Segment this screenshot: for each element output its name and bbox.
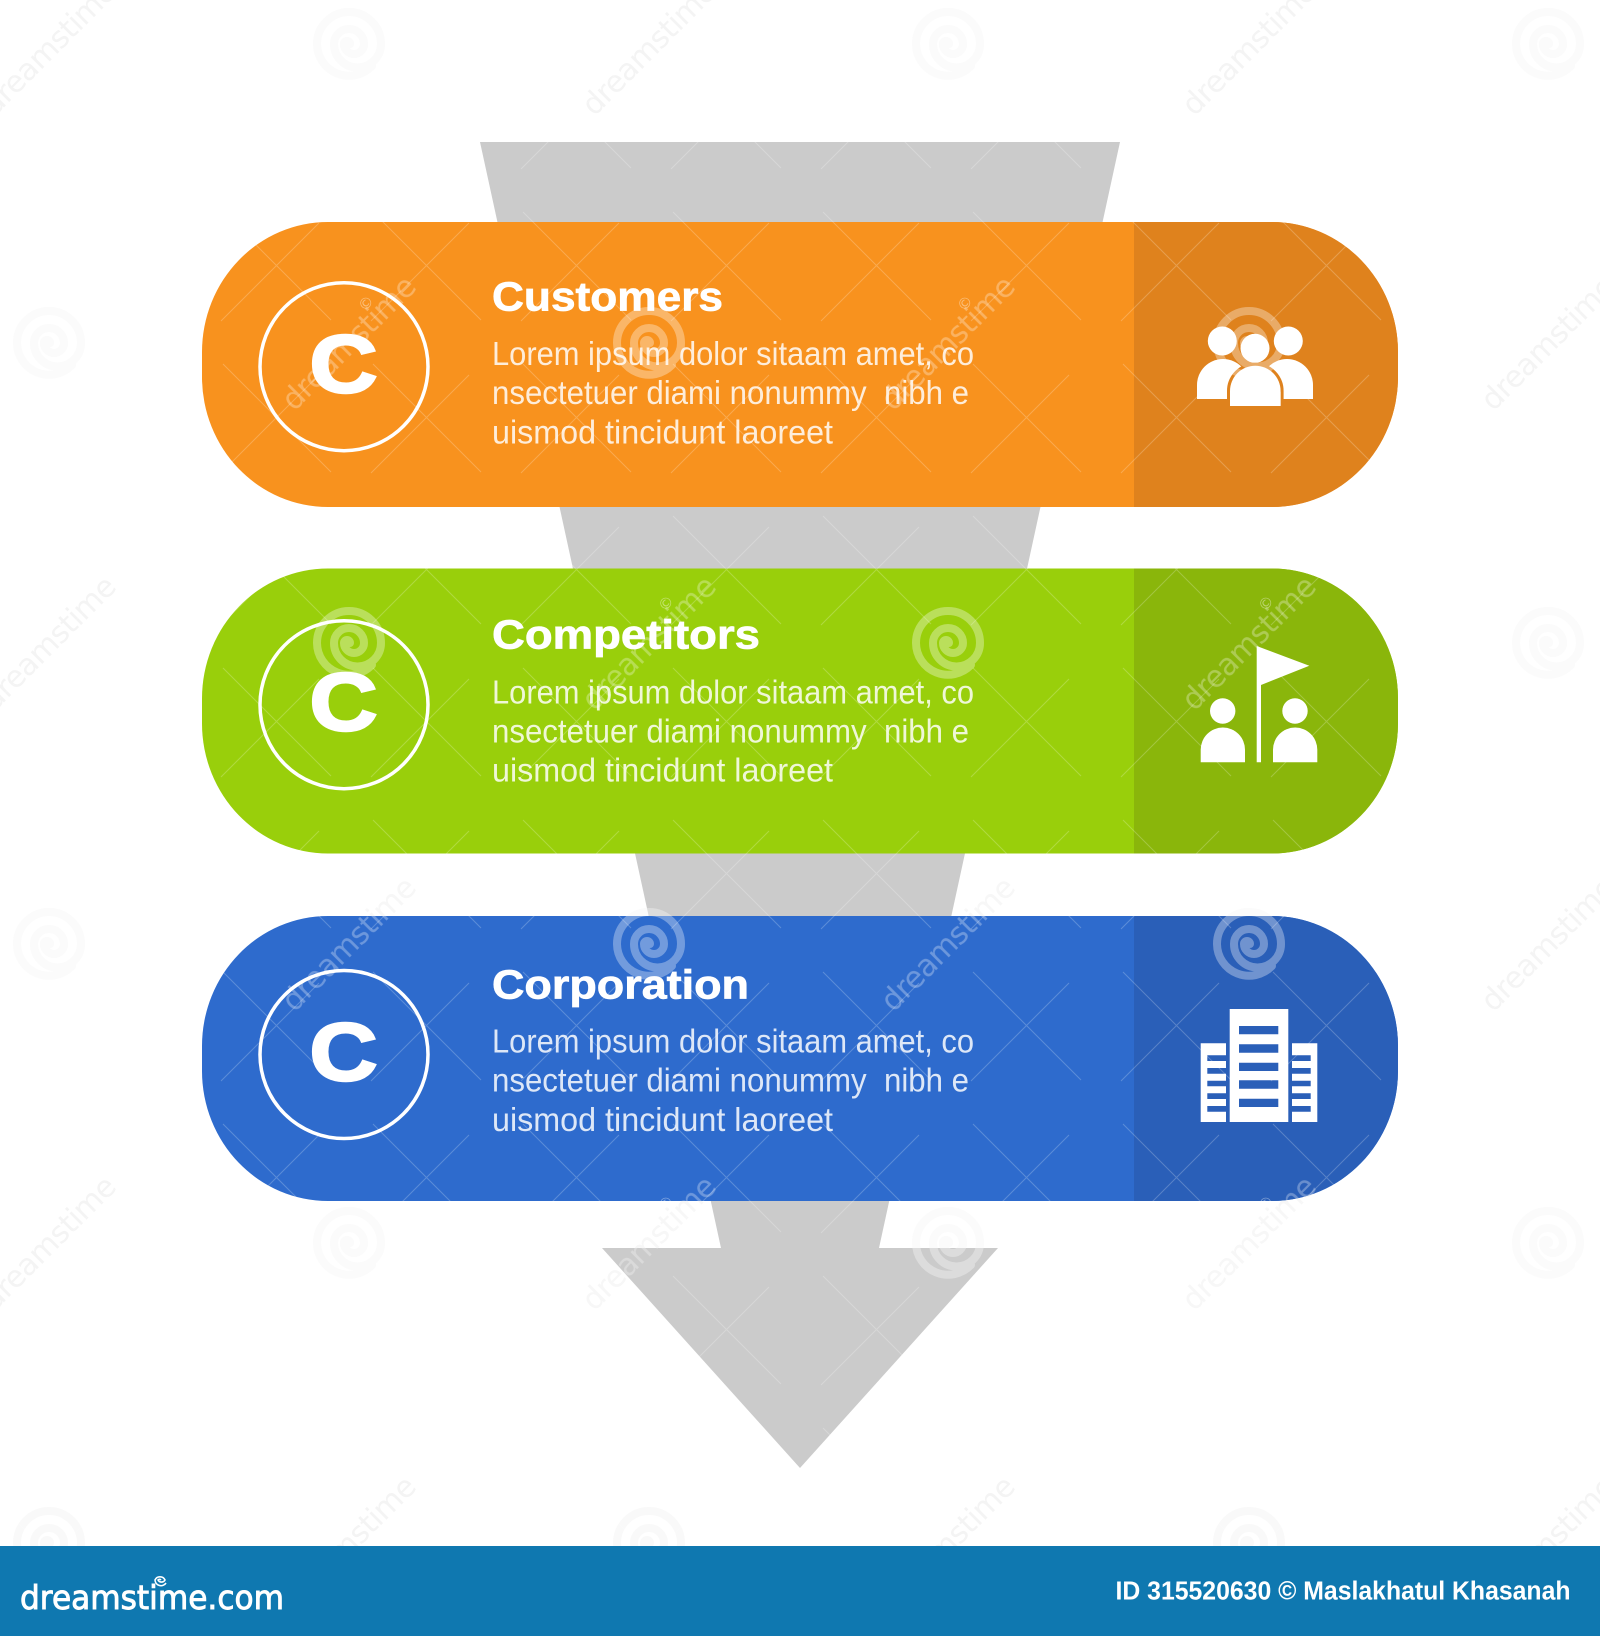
panel: customers: [202, 222, 1398, 507]
icon: two people with flag: [1201, 646, 1317, 762]
text: ©: [354, 893, 378, 916]
footer credit: ID 315520630 © Maslakhatul Khasanah: [1116, 1578, 1570, 1606]
text: dreamstime: [1175, 1169, 1324, 1318]
icon: office buildings: [1201, 1009, 1317, 1122]
text: dreamstime: [575, 1169, 724, 1318]
text: dreamstime: [1175, 1169, 1324, 1318]
customers letter badge: C: [310, 319, 378, 410]
text: dreamstime: [575, 1169, 724, 1318]
panel: competitors: [202, 568, 1398, 854]
corporation letter badge: C: [310, 1007, 378, 1098]
text: dreamstime: [275, 1469, 424, 1618]
text: dreamstime: [275, 269, 424, 418]
text: dreamstime: [874, 870, 1023, 1019]
icon: people group: [1197, 326, 1313, 406]
text: dreamstime: [275, 870, 424, 1019]
customers icon panel: [1134, 222, 1398, 507]
corporation body text: [492, 1022, 974, 1138]
funnel arrow: [480, 142, 1120, 1468]
footer logo: dreamstime.com: [20, 1578, 284, 1617]
text: dreamstime: [874, 269, 1023, 418]
text: dreamstime: [874, 269, 1023, 418]
text: ©: [1254, 592, 1278, 615]
footer bar: [0, 1546, 1600, 1636]
panel: corporation: [202, 916, 1398, 1201]
customers body text: Lorem ipsum dolor sitaam amet, co: [492, 335, 974, 372]
competitors body text: uismod tincidunt laoreet: [492, 752, 833, 789]
text: dreamstime: [1175, 569, 1324, 718]
text: dreamstime: [275, 269, 424, 418]
text: dreamstime: [575, 569, 724, 718]
competitors heading: Competitors: [492, 611, 760, 657]
customers body text: nsectetuer diami nonummy nibh e: [492, 374, 969, 411]
competitors band: [202, 568, 1398, 854]
corporation icon panel: [1134, 916, 1398, 1201]
corporation body text: uismod tincidunt laoreet: [492, 1101, 833, 1138]
competitors icon panel: [1134, 568, 1398, 854]
text: dreamstime: [275, 870, 424, 1019]
text: ©: [953, 292, 977, 315]
customers body text: [492, 335, 974, 450]
text: ©: [354, 292, 378, 315]
customers letter badge: [260, 283, 428, 451]
corporation heading: Corporation: [492, 961, 749, 1007]
customers heading: Customers: [492, 274, 723, 320]
text: dreamstime: [575, 569, 724, 718]
text: dreamstime: [874, 1469, 1023, 1618]
competitors body text: Lorem ipsum dolor sitaam amet, co: [492, 673, 974, 710]
corporation letter badge: [260, 970, 428, 1138]
competitors body text: [492, 673, 974, 789]
text: ©: [953, 893, 977, 916]
corporation body text: Lorem ipsum dolor sitaam amet, co: [492, 1022, 974, 1059]
customers band: [202, 222, 1398, 507]
text: ©: [654, 592, 678, 615]
text: dreamstime: [1175, 569, 1324, 718]
text: dreamstime: [874, 870, 1023, 1019]
competitors letter badge: [260, 621, 428, 789]
corporation band: [202, 916, 1398, 1201]
competitors body text: nsectetuer diami nonummy nibh e: [492, 712, 969, 749]
text: ©: [1254, 1192, 1278, 1215]
text: ©: [654, 1192, 678, 1215]
customers body text: uismod tincidunt laoreet: [492, 414, 833, 450]
competitors letter badge: C: [310, 657, 378, 748]
corporation body text: nsectetuer diami nonummy nibh e: [492, 1062, 969, 1099]
